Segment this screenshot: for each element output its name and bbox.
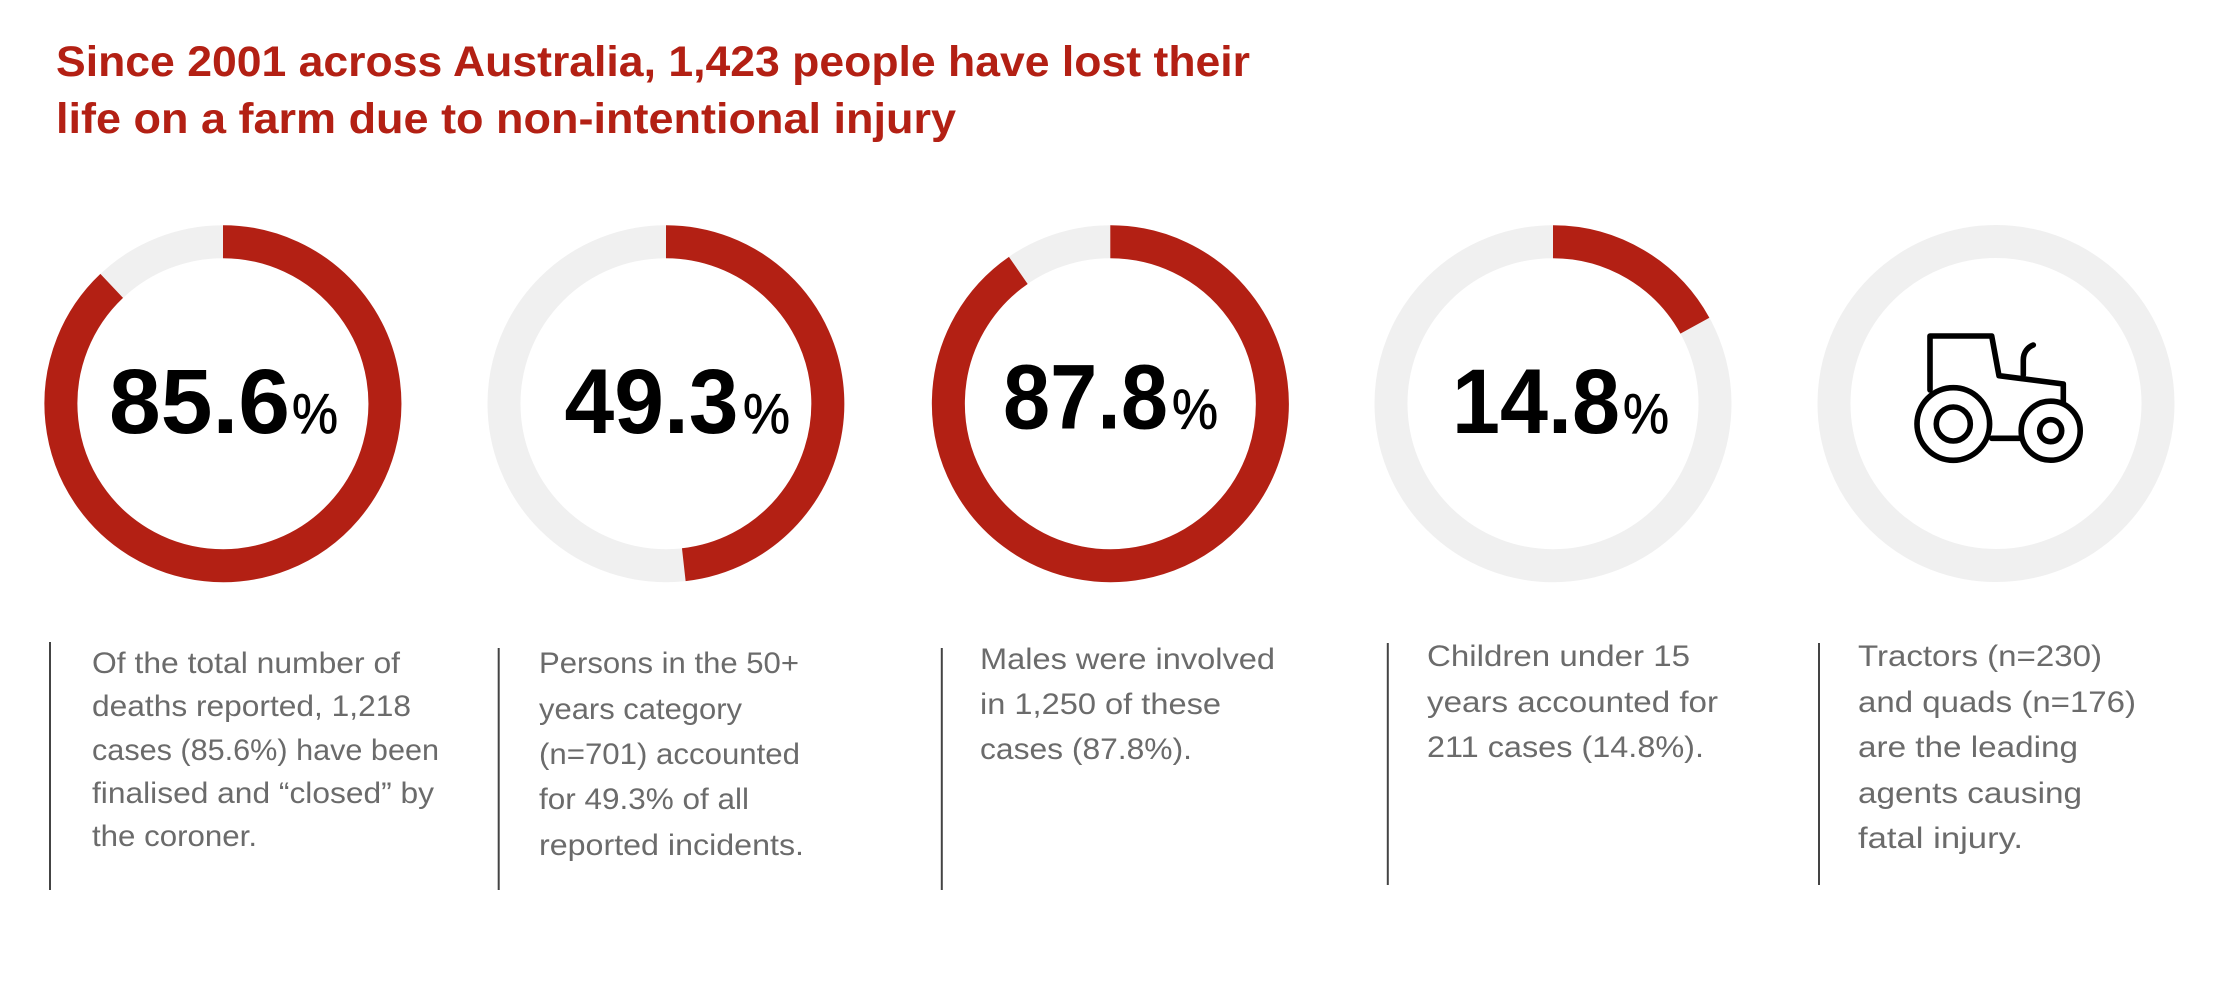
- text block: children: Children under 15: [1427, 640, 1690, 673]
- donut chart: 87.8%: %: [1172, 378, 1218, 442]
- panel: males: [942, 242, 1275, 890]
- text block: persons 50+: (n=701) accounted: [539, 738, 800, 771]
- text block: tractors and quads: Tractors (n=230): [1858, 640, 2102, 673]
- title: [56, 38, 1250, 143]
- ring with tractor icon: [1834, 242, 2158, 566]
- donut chart: 49.3%: 49.3: [564, 351, 738, 453]
- text block: persons 50+: reported incidents.: [539, 829, 804, 862]
- text block: persons 50+: Persons in the 50+: [539, 647, 799, 680]
- title: Since 2001 across Australia, 1,423 people have lost their: [56, 38, 1250, 86]
- donut chart: 14.8%: [1391, 242, 1715, 566]
- panel: children: [1388, 242, 1718, 885]
- donut chart: 87.8%: 87.8: [1003, 346, 1168, 448]
- text block: closed cases: Of the total number of: [92, 647, 401, 680]
- text block: closed cases: [92, 647, 439, 853]
- text block: males: Males were involved: [980, 643, 1275, 676]
- donut chart: 14.8%: %: [1623, 382, 1669, 446]
- text block: children: years accounted for: [1427, 686, 1718, 719]
- text block: tractors and quads: and quads (n=176): [1858, 686, 2136, 719]
- text block: closed cases: finalised and “closed” by: [92, 777, 434, 810]
- text block: males: [980, 643, 1275, 766]
- panel: persons 50+: [499, 242, 828, 890]
- title: life on a farm due to non-intentional injury: [56, 95, 956, 143]
- text block: closed cases: cases (85.6%) have been: [92, 734, 439, 767]
- text block: tractors and quads: [1858, 640, 2136, 855]
- text block: tractors and quads: are the leading: [1858, 731, 2078, 764]
- panel: closed cases: [50, 242, 439, 890]
- text block: persons 50+: [539, 647, 804, 862]
- text block: tractors and quads: agents causing: [1858, 777, 2082, 810]
- donut chart: 85.6%: 85.6: [109, 351, 290, 453]
- text block: persons 50+: for 49.3% of all: [539, 783, 749, 816]
- donut chart: 49.3%: [504, 242, 828, 566]
- icon: tractor: [1917, 336, 2080, 460]
- text block: closed cases: deaths reported, 1,218: [92, 690, 411, 723]
- text block: closed cases: the coroner.: [92, 820, 257, 853]
- text block: males: cases (87.8%).: [980, 733, 1192, 766]
- donut chart: 14.8%: 14.8: [1452, 351, 1620, 453]
- text block: children: 211 cases (14.8%).: [1427, 731, 1704, 764]
- text block: children: [1427, 640, 1718, 764]
- panel: tractors and quads: [1819, 242, 2158, 885]
- donut chart: 87.8%: [948, 242, 1272, 566]
- donut chart: 49.3%: %: [743, 382, 790, 446]
- donut chart: 85.6%: %: [292, 382, 338, 446]
- text block: males: in 1,250 of these: [980, 688, 1221, 721]
- donut chart: 85.6%: [61, 242, 385, 566]
- text block: tractors and quads: fatal injury.: [1858, 822, 2023, 855]
- text block: persons 50+: years category: [539, 693, 742, 726]
